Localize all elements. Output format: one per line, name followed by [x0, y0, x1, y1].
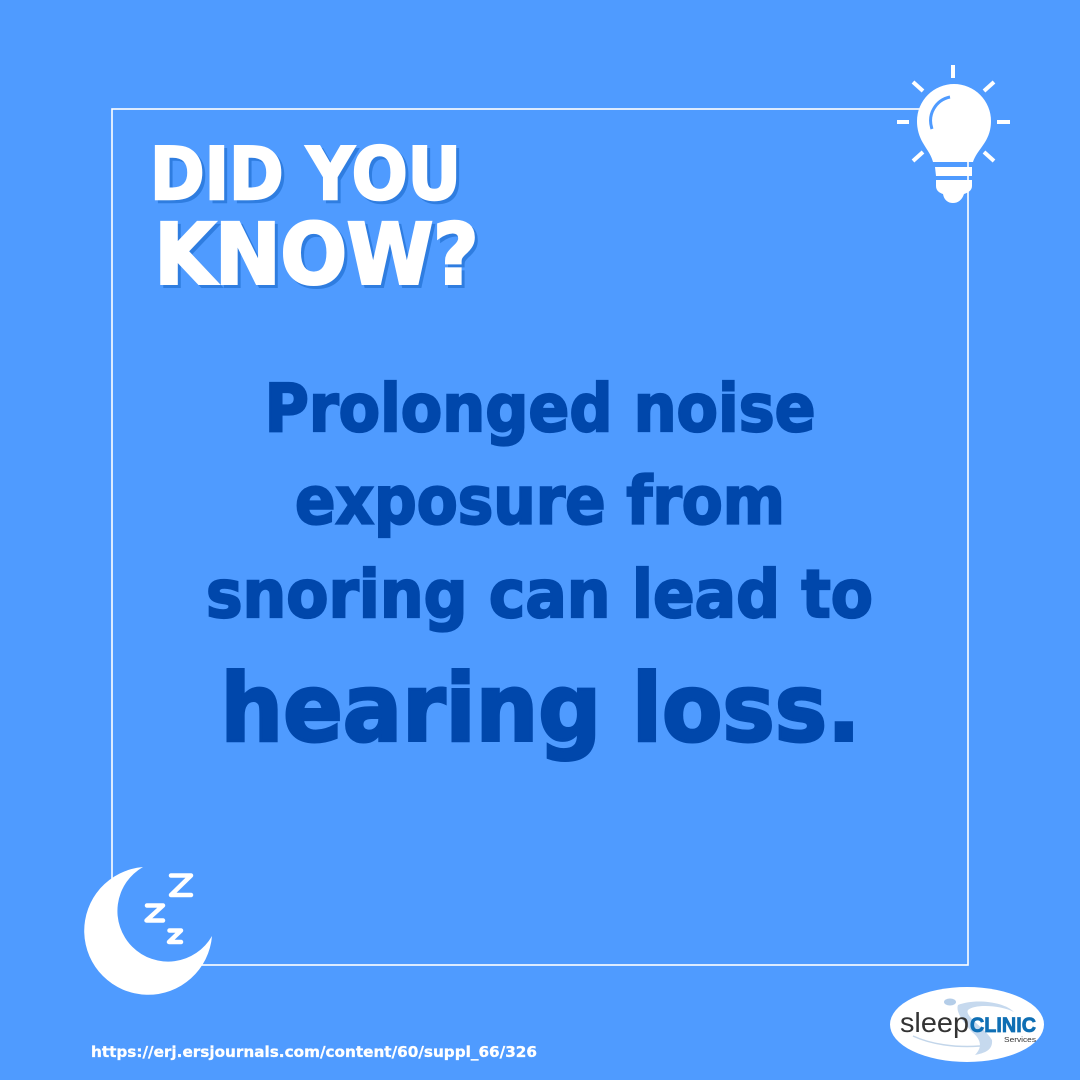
logo: sleep clinic: [890, 987, 1044, 1062]
logo: sleep clinic: Services: [1004, 1035, 1036, 1044]
title: KNOW?: [158, 208, 482, 306]
logo: sleep clinic: sleep: [900, 1007, 969, 1038]
title: DID YOU: [150, 132, 461, 216]
main message: Prolonged noise: [265, 370, 816, 447]
main message: exposure from: [295, 462, 785, 540]
main message: snoring can lead to: [206, 556, 873, 633]
main message: hearing loss.: [220, 654, 860, 764]
icon: light bulb: [897, 65, 1010, 203]
main message: [206, 370, 873, 764]
title: DID YOU: [153, 135, 464, 219]
frame: [112, 109, 968, 965]
title: KNOW?: [154, 206, 478, 304]
source url: https://erj.ersjournals.com/content/60/suppl_66/326: [91, 1043, 537, 1061]
logo: sleep clinic: CLINIC: [970, 1014, 1036, 1037]
title: [150, 132, 482, 306]
icon: crescent moon with Z letters: [84, 867, 212, 995]
